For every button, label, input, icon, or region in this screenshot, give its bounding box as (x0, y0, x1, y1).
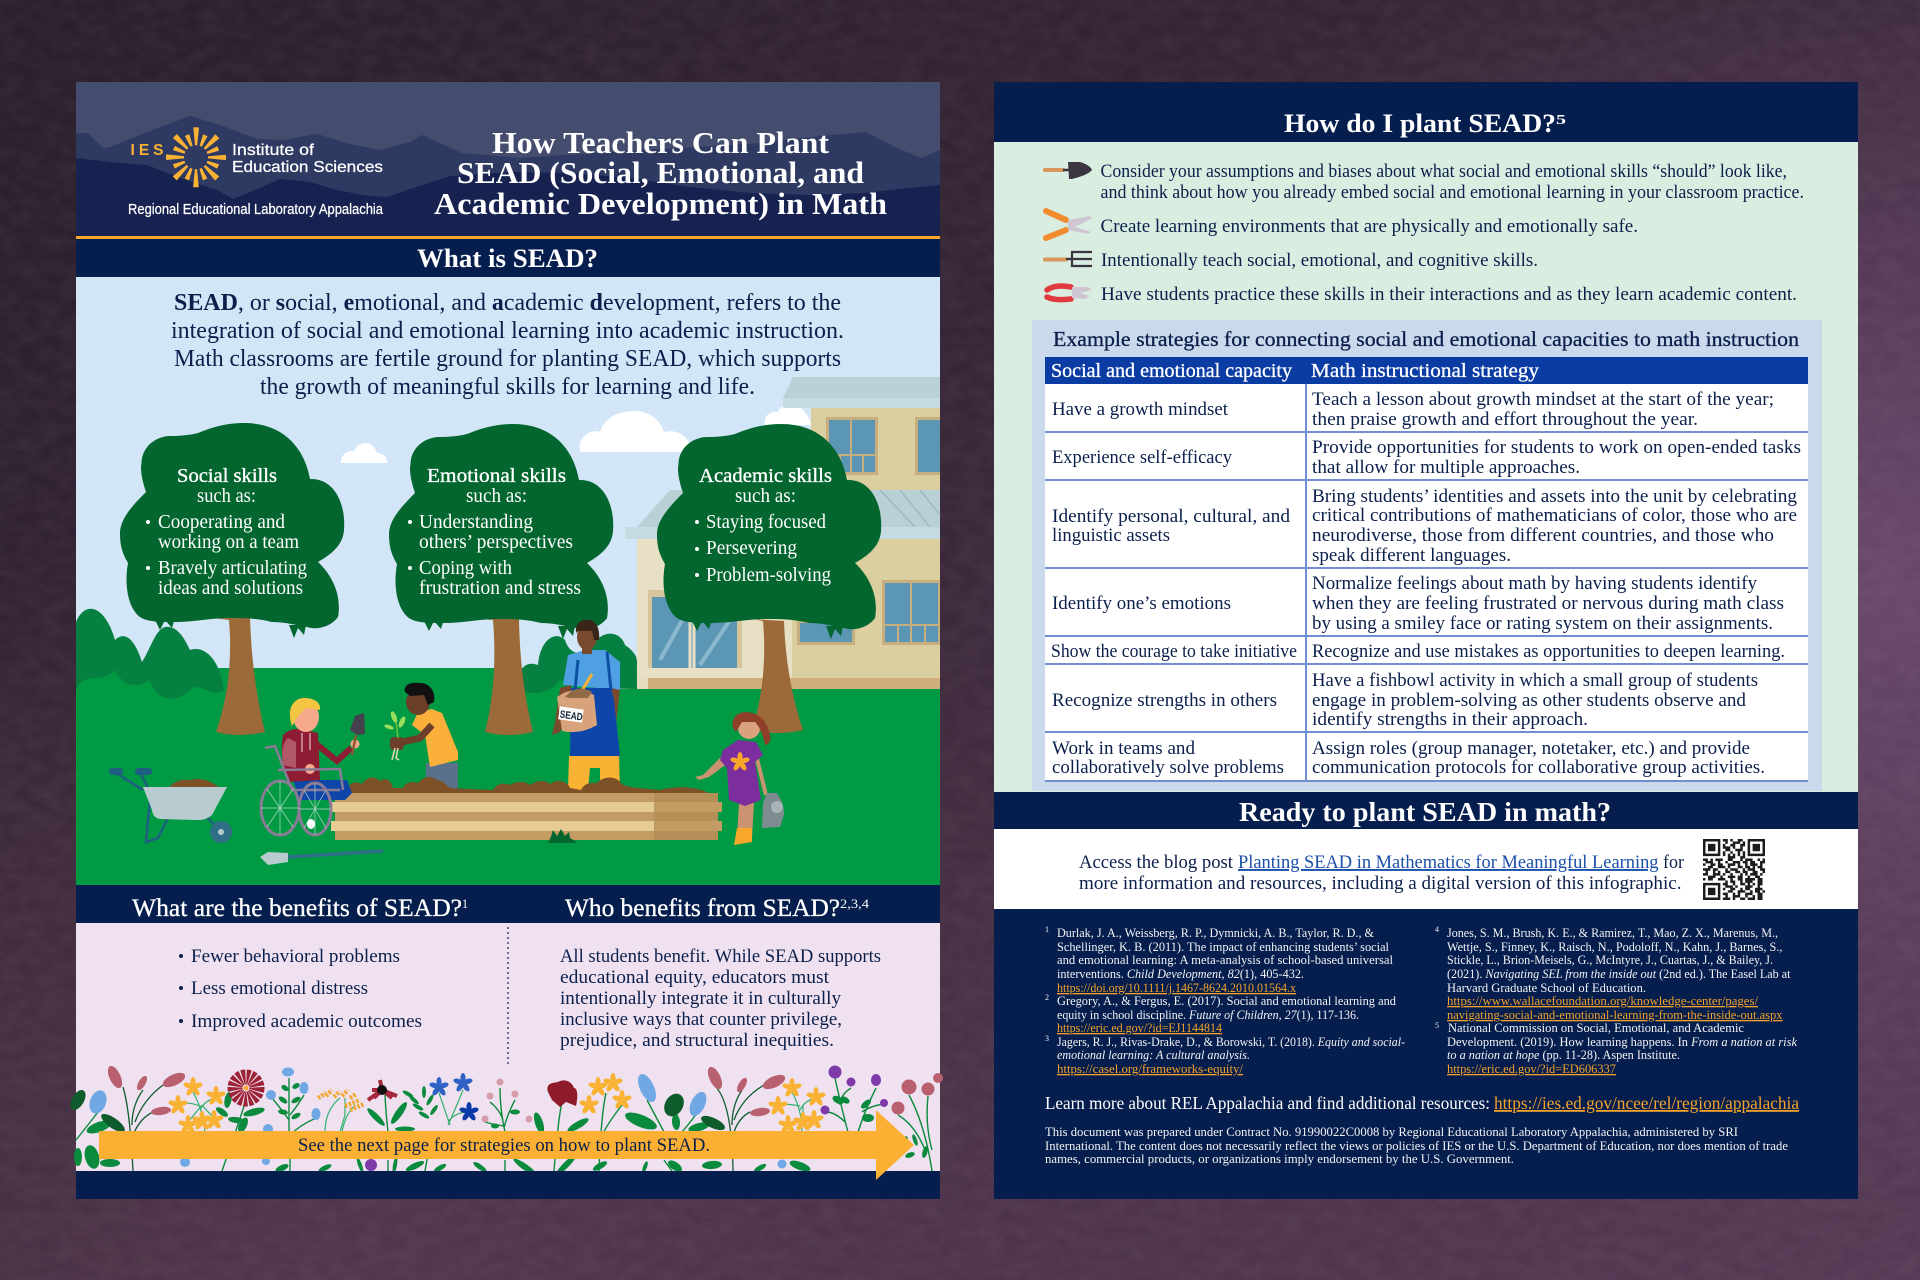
bushes (76, 609, 637, 699)
how-to text (1100, 161, 1804, 305)
coneflower (368, 1080, 397, 1100)
references column one: and emotional learning: A meta-analysis of school-based universal (1057, 952, 1393, 967)
callout arrow: see the next page: See the next page for strategies on how to plant SEAD. (298, 1136, 710, 1156)
red daisy (235, 1077, 257, 1099)
row: emotions: when they are feeling frustrated or nervous during math class (1312, 593, 1784, 614)
heading band: benefits (76, 885, 940, 923)
row: teams: Work in teams and (1052, 738, 1195, 759)
tree text: academic skills: Persevering (706, 538, 797, 559)
references column one: Jagers, R. J., Rivas-Drake, D., & Borowski, T. (2018). Equity and social- (1057, 1034, 1405, 1049)
row: self-efficacy (1052, 437, 1801, 478)
row: courage (1051, 641, 1785, 662)
row: self-efficacy: Provide opportunities for students to work on open-ended tasks (1312, 437, 1801, 458)
tree text: academic skills: Staying focused (706, 512, 826, 533)
row: growth mindset (1052, 389, 1774, 430)
logo text (128, 142, 384, 218)
how-to text: Have students practice these skills in their interactions and as they learn academic content. (1101, 284, 1797, 305)
tree: emotional skills (389, 424, 613, 735)
references column one: 1 (1045, 925, 1049, 934)
flower border (67, 1064, 943, 1177)
tree: academic skills (657, 424, 881, 733)
blog post text: Planting SEAD in Mathematics for Meaningful Learning (1238, 852, 1659, 873)
tree text: academic skills: such as: (735, 486, 796, 507)
benefits list: Less emotional distress (191, 978, 368, 999)
orange rule (76, 236, 940, 240)
references column one: 3 (1045, 1034, 1049, 1043)
tree text: emotional skills: Coping with (419, 558, 512, 579)
building (625, 377, 940, 678)
row: assets: speak different languages. (1312, 545, 1511, 566)
blog post text: Access the blog post (1079, 852, 1234, 873)
icon: pruners (1046, 211, 1092, 238)
row: assets: critical contributions of mathematicians of color, those who are (1312, 505, 1797, 526)
tree text: social skills: Bravely articulating (158, 558, 307, 579)
references column two: (2021). Navigating SEL from the inside out (2nd ed.). The Easel Lab at (1447, 966, 1791, 981)
references column two: National Commission on Social, Emotional, and Academic (1448, 1020, 1744, 1035)
references column two: 5 (1435, 1021, 1439, 1030)
title (434, 125, 887, 221)
footer band (76, 1171, 940, 1199)
table header: Social and emotional capacity (1051, 360, 1292, 382)
benefits list: Improved academic outcomes (191, 1011, 422, 1032)
row: assets: Bring students’ identities and assets into the unit by celebrating (1312, 486, 1797, 507)
yellow blossoms (168, 1073, 826, 1135)
row: teams: Assign roles (group manager, notetaker, etc.) and provide (1312, 738, 1750, 759)
table header: Math instructional strategy (1311, 360, 1539, 382)
row: strengths: identify strengths in their approach. (1312, 709, 1588, 730)
references column one: Gregory, A., & Fergus, E. (2017). Social and emotional learning and (1057, 993, 1396, 1008)
tree text: emotional skills: frustration and stress (419, 578, 581, 599)
row: growth mindset: Teach a lesson about growth mindset at the start of the year; (1312, 389, 1774, 410)
heading band: how do I plant SEAD (994, 82, 1858, 142)
tree text: emotional skills: Emotional skills (427, 465, 566, 487)
panel: how-to list (994, 142, 1858, 792)
logo: IES sunburst: IES (130, 142, 164, 159)
logo text: Regional Educational Laboratory Appalachia (128, 202, 384, 218)
raised garden bed (331, 793, 722, 840)
row: emotions: by using a smiley face or rating system on their assignments. (1312, 613, 1773, 634)
row: strengths: Recognize strengths in others (1052, 690, 1277, 711)
intro paragraph: integration of social and emotional learning into academic instruction. (171, 317, 844, 344)
stems (76, 1078, 932, 1171)
tree text: academic skills (695, 465, 832, 586)
references column two: Development. (2019). How learning happens. In From a nation at risk (1447, 1034, 1797, 1049)
intro paragraph (171, 289, 844, 400)
person: girl with watering can (695, 712, 784, 845)
tree text: emotional skills: others’ perspectives (419, 532, 573, 553)
who benefits paragraph (560, 946, 881, 1051)
who benefits paragraph: prejudice, and structural inequities. (560, 1030, 834, 1051)
QR code (1703, 840, 1765, 899)
person: student in wheelchair with trowel (261, 698, 365, 835)
who benefits paragraph: educational equity, educators must (560, 967, 830, 988)
heading band: how do I plant SEAD: 5 (1556, 113, 1566, 128)
references column one (1045, 925, 1405, 1076)
title: How Teachers Can Plant (492, 125, 830, 160)
learn more line: https://ies.ed.gov/ncee/rel/region/appalachia (1494, 1093, 1799, 1113)
icon: fork (1045, 252, 1092, 266)
tree text: emotional skills: Understanding (419, 512, 533, 533)
buds (105, 1064, 943, 1117)
references column one: https://eric.ed.gov/?id=EJ1144814 (1057, 1020, 1222, 1035)
row: teams: collaboratively solve problems (1052, 757, 1284, 778)
title: SEAD (Social, Emotional, and (457, 155, 864, 190)
tree text: social skills: working on a team (158, 532, 299, 553)
blog post text: more information and resources, including a digital version of this infographic. (1079, 873, 1682, 894)
references column two: 4 (1435, 925, 1439, 934)
references column two: Harvard Graduate School of Education. (1447, 980, 1646, 995)
intro paragraph: SEAD, or social, emotional, and academic development, refers to the (174, 289, 841, 316)
table rows (1051, 389, 1801, 778)
panel: benefits and flowers (67, 923, 943, 1177)
logo text: Institute of (232, 142, 315, 159)
how-to text: and think about how you already embed social and emotional learning in your classroom practice. (1100, 182, 1804, 203)
tree text: emotional skills: such as: (466, 486, 527, 507)
grass tuft (548, 829, 577, 843)
row: strengths: engage in problem-solving as other students observe and (1312, 690, 1746, 711)
logo text: Education Sciences (232, 159, 383, 176)
person: teacher with seed bag (552, 620, 620, 790)
row: strengths: Have a fishbowl activity in which a small group of students (1312, 670, 1758, 691)
row: growth mindset: Have a growth mindset (1052, 399, 1229, 420)
row: emotions: Normalize feelings about math by having students identify (1312, 573, 1757, 594)
benefits list (179, 946, 422, 1032)
blog post text: for (1663, 852, 1685, 873)
who benefits paragraph: All students benefit. While SEAD supports (560, 946, 881, 967)
how-to text: Create learning environments that are physically and emotionally safe. (1100, 216, 1638, 237)
soil (348, 777, 709, 793)
references column two: navigating-social-and-emotional-learning-from-the-inside-out.aspx (1447, 1007, 1783, 1022)
panel: page one (67, 82, 943, 1199)
building foundation (620, 668, 940, 689)
shovel (260, 851, 383, 865)
row: self-efficacy: Experience self-efficacy (1052, 447, 1232, 468)
disclaimer (1045, 1124, 1788, 1166)
row: courage: Show the courage to take initiative (1051, 641, 1297, 662)
how-to text: Intentionally teach social, emotional, and cognitive skills. (1101, 250, 1538, 271)
lawn (76, 668, 940, 885)
tree: social skills (120, 423, 344, 735)
purple flowers (365, 1066, 888, 1171)
row: growth mindset: then praise growth and effort throughout the year. (1312, 409, 1698, 430)
references column one: 2 (1045, 993, 1049, 1002)
heading band: ready to plant (994, 792, 1858, 829)
person: child with plant (384, 683, 458, 790)
intro paragraph: Math classrooms are fertile ground for planting SEAD, which supports (174, 345, 841, 372)
references column one: https://doi.org/10.1111/j.1467-8624.2010.01564.x (1057, 980, 1296, 995)
tree text: social skills: ideas and solutions (158, 578, 303, 599)
row: courage: Recognize and use mistakes as opportunities to deepen learning. (1312, 641, 1785, 662)
row: assets: linguistic assets (1052, 525, 1170, 546)
panel: page two (994, 82, 1858, 1199)
references column one: emotional learning: A cultural analysis. (1057, 1047, 1250, 1062)
heading: who benefits: Who benefits from SEAD? (565, 895, 840, 922)
illustrated garden scene (76, 277, 940, 885)
blog post text (1079, 852, 1685, 894)
references column one: equity in school discipline. Future of Children, 27(1), 117-136. (1057, 1007, 1359, 1022)
blue flowers (429, 1073, 473, 1097)
tree text: social skills: Cooperating and (158, 512, 285, 533)
references column two: Wettje, S., Finney, K., Raisch, N., Podoloff, N., Kahn, J., Barnes, S., (1447, 939, 1782, 954)
benefits list: Fewer behavioral problems (191, 946, 400, 967)
references column two: to a nation at hope (pp. 11-28). Aspen Institute. (1447, 1047, 1680, 1062)
heading: benefits of SEAD: What are the benefits of SEAD? (132, 895, 462, 922)
seed bag label: SEAD (559, 709, 584, 724)
row: teams (1052, 738, 1765, 778)
panel: references and credits (994, 909, 1858, 1199)
tree text: academic skills: Problem-solving (706, 565, 831, 586)
tree text: emotional skills (408, 465, 581, 599)
row: assets (1052, 486, 1797, 566)
heading: who benefits: 2,3,4 (840, 896, 870, 911)
row: emotions (1052, 573, 1784, 634)
row: self-efficacy: that allow for multiple approaches. (1312, 457, 1580, 478)
tree text: social skills (146, 465, 307, 599)
row: teams: communication protocols for collaborative group activities. (1312, 757, 1765, 778)
red rose (547, 1080, 577, 1107)
logo: IES sunburst (130, 136, 217, 178)
heading band: ready to plant: Ready to plant SEAD in math? (1239, 797, 1611, 827)
leaves (74, 1082, 929, 1177)
references column two: Stickle, L., Brion-Meisels, G., McIntyre, J., Cuartas, J., & Bailey, J. (1447, 952, 1773, 967)
tree text: social skills: such as: (197, 486, 256, 507)
heading band: What is SEAD? (76, 239, 940, 277)
intro paragraph: the growth of meaningful skills for learning and life. (260, 373, 755, 400)
references column one: Schellinger, K. B. (2011). The impact of enhancing students’ social (1057, 939, 1389, 954)
icon: trowel (1045, 162, 1092, 179)
table header (1045, 357, 1808, 384)
row: strengths (1052, 670, 1758, 730)
row: assets: neurodiverse, those from different countries, and those who (1312, 525, 1774, 546)
row: emotions: Identify one’s emotions (1052, 593, 1231, 614)
strategies table (1045, 357, 1808, 781)
disclaimer: This document was prepared under Contract No. 91990022C0008 by Regional Educational Laboratory Appalachia, administered by SRI (1045, 1124, 1738, 1139)
title: Academic Development) in Math (434, 186, 887, 221)
references column two (1435, 925, 1797, 1076)
references column two: https://www.wallacefoundation.org/knowledge-center/pages/ (1447, 993, 1758, 1008)
panel: example strategies (1032, 320, 1822, 791)
disclaimer: International. The content does not necessarily reflect the views or policies of IES or the U.S. Department of Education, nor does mention of trade (1045, 1138, 1788, 1153)
who benefits paragraph: intentionally integrate it in culturally (560, 988, 841, 1009)
table heading: Example strategies for connecting social and emotional capacities to math instruction (1053, 327, 1800, 351)
references column one: interventions. Child Development, 82(1), 405-432. (1057, 966, 1304, 981)
header with mountains (76, 82, 940, 236)
references column one: Durlak, J. A., Weissberg, R. P., Dymnicki, A. B., Taylor, R. D., & (1057, 925, 1374, 940)
tree text: academic skills: Academic skills (699, 465, 832, 487)
callout arrow: see the next page (99, 1110, 914, 1180)
tree text: social skills: Social skills (177, 465, 277, 487)
who benefits paragraph: inclusive ways that counter privilege, (560, 1009, 842, 1030)
references column two: Jones, S. M., Brush, K. E., & Ramirez, T., Mao, Z. X., Marenus, M., (1447, 925, 1778, 940)
icon: loppers (1047, 286, 1092, 300)
panel: blog post call to action (994, 829, 1858, 909)
heading: benefits of SEAD: 1 (462, 896, 468, 911)
references column two: https://eric.ed.gov/?id=ED606337 (1447, 1061, 1616, 1076)
clouds (341, 404, 811, 463)
learn more line (1045, 1093, 1799, 1113)
blue blossoms (86, 1068, 786, 1168)
references column one: https://casel.org/frameworks-equity/ (1057, 1061, 1243, 1076)
wheelbarrow (109, 768, 232, 843)
learn more line: Learn more about REL Appalachia and find additional resources: (1045, 1093, 1490, 1113)
heading band: What is SEAD?: What is SEAD? (417, 244, 598, 273)
how-to text: Consider your assumptions and biases about what social and emotional skills “should” look like, (1100, 161, 1787, 182)
disclaimer: names, commercial products, or organizations imply endorsement by the U.S. Government. (1045, 1151, 1514, 1166)
row: assets: Identify personal, cultural, and (1052, 506, 1290, 527)
heading band: how do I plant SEAD: How do I plant SEAD? (1284, 109, 1556, 138)
